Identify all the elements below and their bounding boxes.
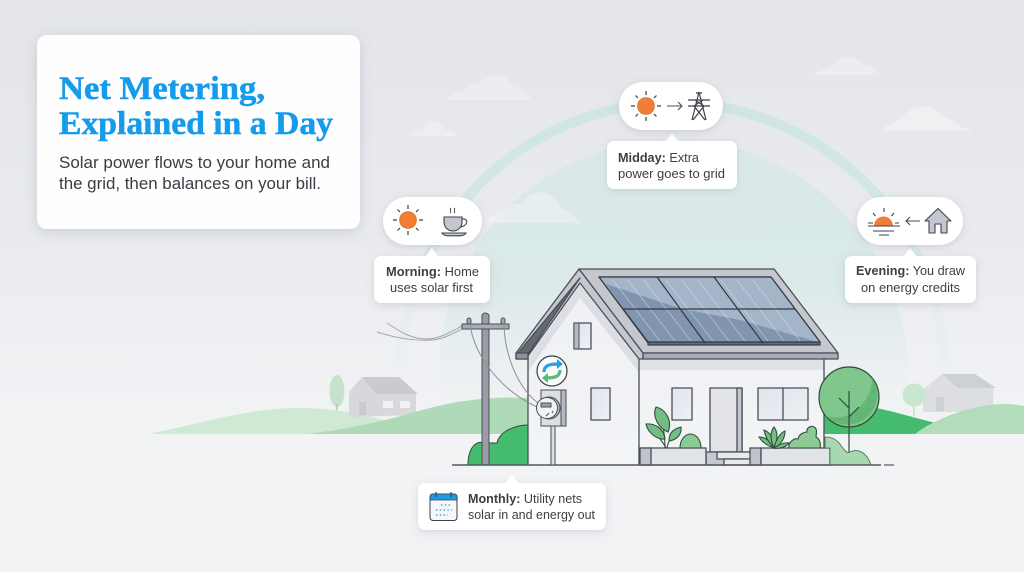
door xyxy=(710,388,742,452)
midday label: power goes to grid xyxy=(618,167,725,181)
walls outline xyxy=(528,359,824,465)
evening label: Evening: You draw xyxy=(856,264,964,278)
sun path disc xyxy=(438,140,908,425)
icon: small house xyxy=(925,208,951,233)
panel: evening xyxy=(845,197,976,303)
icon: calendar xyxy=(430,492,457,520)
distant house left xyxy=(349,377,418,417)
window left xyxy=(591,388,610,420)
distant tree left xyxy=(330,375,344,410)
house walls xyxy=(528,283,824,465)
steps xyxy=(706,452,761,465)
plants right xyxy=(759,426,820,448)
evening label: on energy credits xyxy=(861,281,960,295)
icon: transmission tower xyxy=(688,92,710,120)
sun path arc xyxy=(401,103,945,410)
front hill left xyxy=(307,398,530,434)
midday label xyxy=(607,134,737,189)
tree xyxy=(819,367,879,452)
panel: monthly xyxy=(418,475,606,530)
main roof xyxy=(579,269,838,353)
morning label xyxy=(374,248,490,303)
gable roof xyxy=(516,269,643,359)
shrub right of house xyxy=(825,437,871,465)
planter left xyxy=(640,448,706,465)
distant tree right xyxy=(902,384,926,418)
morning label: uses solar first xyxy=(390,281,474,295)
icon: morning sun xyxy=(393,205,423,235)
panel: title card xyxy=(37,35,360,229)
front hill right xyxy=(915,404,1024,434)
clouds xyxy=(409,57,972,223)
ground line xyxy=(452,464,894,466)
icon: midday sun xyxy=(631,91,661,121)
electric meter xyxy=(536,390,566,426)
distant back hill xyxy=(148,408,420,434)
title: Net Metering, xyxy=(59,71,265,107)
wires to the left xyxy=(377,323,466,340)
icon: coffee cup xyxy=(442,208,467,236)
midday label: Midday: Extra xyxy=(618,151,699,165)
panel: morning xyxy=(374,197,490,303)
utility pole xyxy=(462,313,509,465)
arrow: sun to grid xyxy=(667,102,682,110)
morning icon pill xyxy=(383,197,482,245)
title: Explained in a Day xyxy=(59,106,333,142)
gable window xyxy=(574,323,591,349)
double window xyxy=(758,388,808,420)
distant house right xyxy=(923,374,996,412)
solar panels xyxy=(599,277,820,345)
eave shadow xyxy=(640,359,824,370)
plants left xyxy=(646,407,701,448)
meter post xyxy=(551,426,555,465)
subtitle: the grid, then balances on your bill. xyxy=(59,175,321,193)
bush by pole xyxy=(468,425,529,465)
meter wires xyxy=(470,322,538,407)
panel: monthly: solar in and energy out xyxy=(468,508,596,522)
dark hill right xyxy=(824,398,1000,434)
panel: monthly: Monthly: Utility nets xyxy=(468,492,582,506)
evening icon pill xyxy=(857,197,963,245)
evening label xyxy=(845,248,976,303)
gable shadow xyxy=(528,285,639,372)
house xyxy=(516,269,838,465)
arrow: home to credits xyxy=(906,217,920,225)
panel: midday xyxy=(607,82,737,189)
icon: setting sun xyxy=(868,208,900,235)
midday icon pill xyxy=(619,82,723,130)
window front xyxy=(672,388,692,420)
subtitle: Solar power flows to your home and xyxy=(59,154,330,172)
morning label: Morning: Home xyxy=(386,265,478,279)
icon: two-way arrows badge xyxy=(537,356,567,386)
planter right xyxy=(750,448,830,465)
fascia xyxy=(643,353,838,359)
